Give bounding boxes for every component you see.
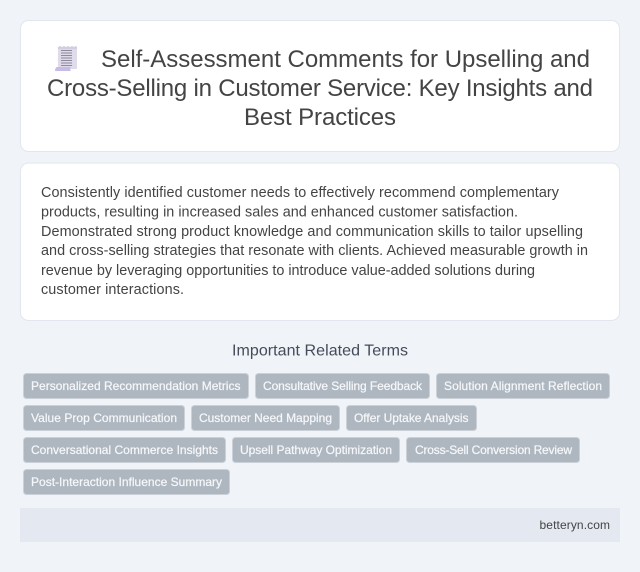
tag: cross-sell conversion review — [406, 438, 580, 462]
title text — [47, 46, 593, 131]
tag: solution alignment reflection — [436, 374, 610, 398]
tag: customer need mapping: Customer Need Mapping — [199, 411, 332, 425]
icon: document scroll — [55, 46, 77, 71]
panel: self-assessment paragraph — [20, 163, 620, 320]
tag: solution alignment reflection: Solution Alignment Reflection — [444, 379, 602, 393]
tag: personalized recommendation metrics — [24, 374, 248, 398]
tag: customer need mapping — [192, 406, 340, 430]
tag: consultative selling feedback — [256, 374, 430, 398]
title text: Self-Assessment Comments for Upselling and — [101, 46, 590, 73]
tag: value prop communication: Value Prop Communication — [31, 411, 177, 425]
paragraph text: revenue by leveraging opportunities to introduce value-added solutions during — [41, 263, 535, 279]
paragraph text: and cross-selling strategies that resonate with clients. Achieved measurable growth in — [41, 243, 588, 259]
tag: offer uptake analysis — [346, 406, 476, 430]
tag: value prop communication — [24, 406, 184, 430]
paragraph text: Demonstrated strong product knowledge and communication skills to tailor upselling — [41, 224, 583, 240]
tag: offer uptake analysis: Offer Uptake Analysis — [354, 411, 468, 425]
title text: Best Practices — [244, 104, 396, 131]
heading: important related terms: Important Related Terms — [232, 342, 408, 360]
tag: upsell pathway optimization — [232, 438, 400, 462]
paragraph text: Consistently identified customer needs to effectively recommend complementary — [41, 185, 560, 201]
tag: cross-sell conversion review: Cross-Sell Conversion Review — [415, 443, 572, 457]
title text: Cross-Selling in Customer Service: Key Insights and — [47, 75, 593, 102]
tag: conversational commerce insights: Conversational Commerce Insights — [31, 443, 218, 457]
footer bar — [20, 508, 620, 542]
paragraph text — [41, 185, 588, 298]
tag: post-interaction influence summary — [24, 470, 230, 494]
tag: consultative selling feedback: Consultative Selling Feedback — [263, 379, 423, 393]
tag: conversational commerce insights — [24, 438, 226, 462]
tag: personalized recommendation metrics: Personalized Recommendation Metrics — [31, 379, 240, 393]
tag: post-interaction influence summary: Post-Interaction Influence Summary — [31, 475, 222, 489]
paragraph text: customer interactions. — [41, 282, 184, 298]
tag list — [24, 374, 610, 494]
paragraph text: products, resulting in increased sales and enhanced customer satisfaction. — [41, 204, 518, 220]
footer: site name: betteryn.com — [540, 518, 610, 532]
panel: title card — [20, 20, 620, 152]
tag: upsell pathway optimization: Upsell Pathway Optimization — [240, 443, 392, 457]
